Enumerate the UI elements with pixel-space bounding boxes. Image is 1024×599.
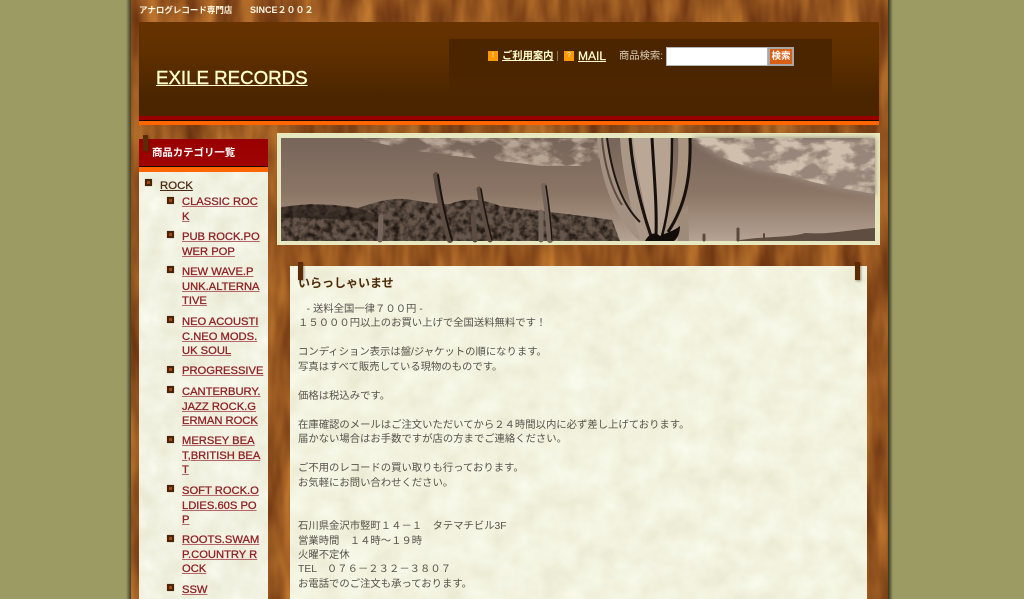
link: soft rock: SOFT ROCK.O [182, 485, 259, 497]
welcome body text: - 送料全国一律７００円 - １５０００円以上のお買い上げで全国送料無料です！ コンディション表示は盤/ジャケットの順になります。 写真はすべて販売している現物のものです。 価格は税込みです。 在庫確認のメールはご注文いただいてから２４時間以内に必ず差し上げております。 届かない場合はお手数ですが店の方までご連絡ください。 ご不用のレコードの買い取りも行っております。 お気軽にお問い合わせください。 石川県金沢市竪町１４－１ タテマチビル3F 営業時間 １４時～１９時 火曜不定休 TEL ０７６－２３２－３８０７ お電話でのご注文も承っております。 [298, 304, 689, 590]
small cacti [380, 175, 764, 240]
mail link: MAIL [578, 49, 606, 63]
site title: EXILE RECORDS [156, 67, 308, 88]
sidebar category list [139, 172, 268, 599]
link: progressive: PROGRESSIVE [182, 365, 263, 377]
banner: desert cactus photograph [277, 133, 880, 245]
link: soft rock: P [182, 514, 189, 526]
clouds [360, 138, 875, 196]
content tab left [298, 262, 303, 280]
mountains [281, 199, 875, 241]
top tagline: SINCE２００２ [250, 5, 314, 15]
link: new wave: TIVE [182, 295, 207, 307]
top tagline [139, 5, 314, 15]
search button: 検索 [771, 51, 790, 62]
link: mersey beat: T [182, 464, 189, 476]
sidebar tab [143, 135, 148, 151]
link: mersey beat [182, 435, 260, 476]
link: canterbury: CANTERBURY. [182, 386, 261, 398]
welcome heading: いらっしゃいませ [298, 276, 394, 290]
link: classic rock: K [182, 210, 189, 222]
link: canterbury: ERMAN ROCK [182, 415, 258, 427]
link: pub rock: PUB ROCK.PO [182, 231, 260, 243]
guide link: ご利用案内 [502, 51, 553, 62]
wood page column [126, 0, 892, 599]
icon: guide [488, 51, 498, 61]
header panel [139, 22, 879, 125]
search button [768, 47, 794, 66]
link: neo acoustic: UK SOUL [182, 345, 231, 357]
saguaro cactus [597, 138, 690, 241]
link: roots [182, 534, 260, 575]
link: new wave [182, 266, 260, 307]
search and navigation panel [449, 39, 832, 91]
link: ssw: SSW [182, 584, 207, 596]
link: mersey beat: MERSEY BEA [182, 435, 255, 447]
link: classic rock: CLASSIC ROC [182, 196, 258, 208]
link: neo acoustic [182, 316, 258, 357]
separator [557, 51, 558, 61]
link: soft rock: LDIES.60S PO [182, 500, 257, 512]
link: classic rock [182, 196, 258, 222]
sidebar heading text: 商品カテゴリ一覧 [152, 148, 235, 159]
category: ROCK: ROCK [160, 180, 193, 192]
link: roots: ROOTS.SWAM [182, 534, 259, 546]
link: mersey beat: T,BRITISH BEA [182, 450, 260, 462]
main content panel [290, 266, 867, 599]
icon: mail [564, 51, 574, 61]
link: roots: OCK [182, 563, 206, 575]
link: soft rock [182, 485, 259, 526]
link: roots: P.COUNTRY R [182, 548, 257, 560]
link: canterbury: JAZZ ROCK.G [182, 400, 256, 412]
link: pub rock: WER POP [182, 246, 235, 258]
link: new wave: NEW WAVE.P [182, 266, 253, 278]
search input [666, 47, 768, 66]
link: canterbury [182, 386, 261, 427]
link: neo acoustic: C.NEO MODS. [182, 330, 257, 342]
sidebar heading [139, 139, 268, 172]
icon: guide: ! [492, 52, 494, 59]
link: new wave: UNK.ALTERNA [182, 280, 260, 292]
link: pub rock [182, 231, 260, 258]
link: neo acoustic: NEO ACOUSTI [182, 316, 258, 328]
top tagline: アナログレコード専門店 [139, 5, 232, 15]
search label: 商品検索: [619, 51, 663, 62]
content tab right [855, 262, 860, 280]
icon: mail: ? [567, 52, 571, 59]
